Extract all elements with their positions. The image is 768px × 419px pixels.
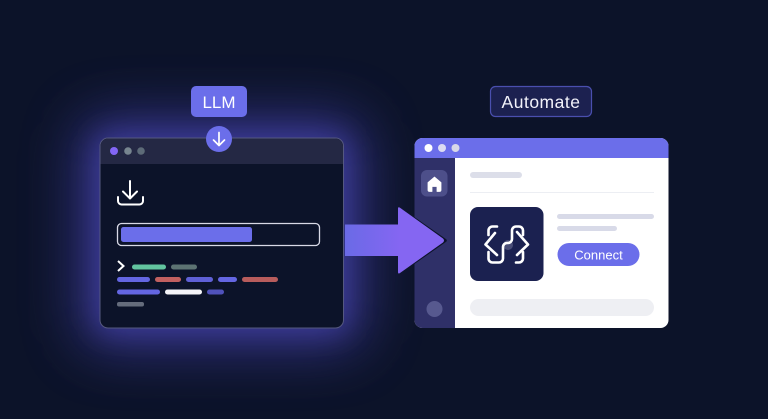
heading placeholder xyxy=(470,172,522,178)
background glow xyxy=(78,116,366,350)
arrow xyxy=(345,207,445,274)
panel: LLM terminal window xyxy=(100,138,344,328)
sidebar xyxy=(414,158,455,328)
button: Connect xyxy=(558,243,640,266)
app header xyxy=(414,138,668,158)
icon: home xyxy=(421,170,448,196)
header dots xyxy=(424,144,460,152)
icon: download tray xyxy=(118,181,143,204)
icon: code tile xyxy=(470,207,544,281)
window dots xyxy=(110,147,145,155)
icon: download circle xyxy=(206,126,232,152)
sidebar avatar xyxy=(426,301,442,317)
badge: LLM xyxy=(191,86,247,117)
badge: Automate xyxy=(490,86,592,116)
code lines xyxy=(117,264,278,306)
text placeholders xyxy=(557,214,654,231)
bottom input pill xyxy=(470,299,654,316)
button: Connect: Connect xyxy=(574,248,623,262)
progress bar xyxy=(118,224,320,246)
terminal title bar xyxy=(100,138,343,164)
badge: LLM: LLM xyxy=(202,93,236,112)
badge: Automate: Automate xyxy=(502,92,580,112)
icon: prompt chevron xyxy=(118,261,124,271)
panel: Automate app window xyxy=(414,138,668,328)
